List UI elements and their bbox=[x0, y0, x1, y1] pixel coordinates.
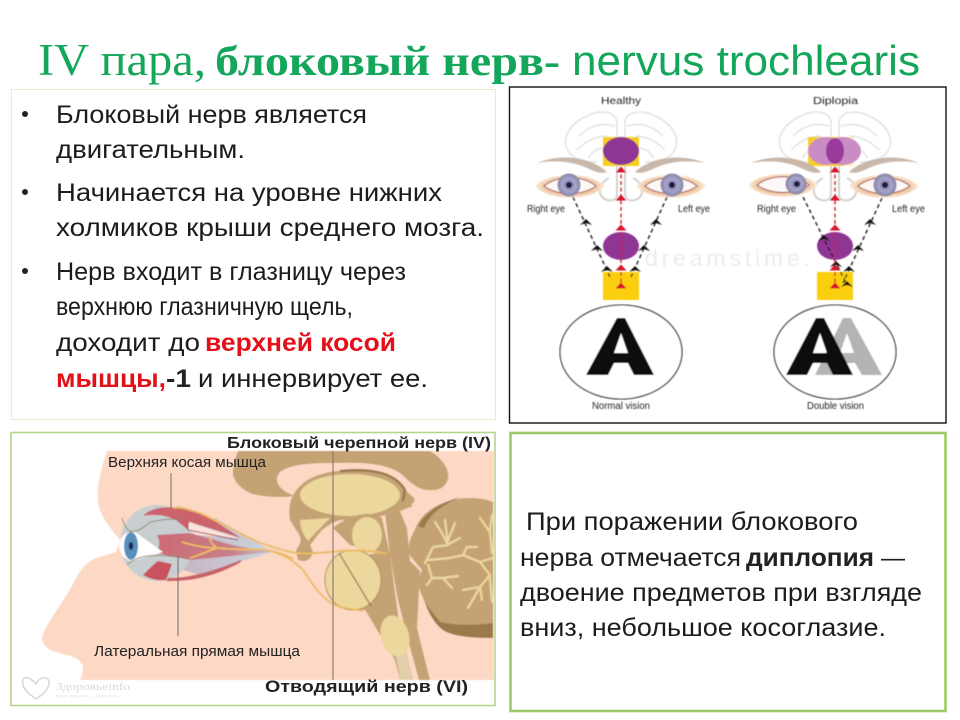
bullet 2 text: холмиков крыши среднего мозга. bbox=[56, 214, 484, 242]
note text: При поражении блокового bbox=[526, 508, 858, 536]
bullet 1 text bbox=[22, 101, 367, 164]
diplopia column: Left eye bbox=[892, 204, 925, 215]
title: IV пара, bbox=[38, 35, 206, 85]
peduncle strip bbox=[385, 501, 430, 680]
note text: нерва отмечается bbox=[520, 544, 741, 572]
cerebrum arch bbox=[233, 451, 448, 497]
diplopia column bbox=[748, 96, 925, 412]
healthy column: Left eye bbox=[678, 204, 710, 215]
right eye bbox=[535, 174, 605, 198]
bullet 3 text: Нерв входит в глазницу через bbox=[56, 258, 406, 286]
double vision circle with two letters A bbox=[774, 305, 896, 399]
cornea and iris bbox=[119, 532, 163, 561]
red arrows bbox=[834, 168, 836, 288]
note text: вниз, небольшое косоглазие. bbox=[520, 614, 886, 642]
label: abducens nerve: Отводящий нерв (VI) bbox=[265, 677, 468, 696]
bullet 2 text: Начинается на уровне нижних bbox=[56, 179, 443, 207]
diplopia column: Right eye bbox=[757, 204, 796, 215]
diplopia column: Diplopia bbox=[813, 96, 859, 107]
healthy column bbox=[527, 96, 710, 412]
bullet 3 text: верхней косой bbox=[205, 329, 396, 357]
logo watermark bbox=[23, 678, 131, 699]
normal vision circle with letter A bbox=[560, 305, 682, 399]
note text bbox=[520, 508, 922, 642]
logo watermark: Будь здоров — будь info bbox=[56, 693, 119, 698]
pointer line: superior oblique bbox=[170, 473, 172, 508]
lateral rectus muscle bbox=[157, 533, 272, 560]
diplopia column: Double vision bbox=[807, 401, 864, 412]
healthy column: Healthy bbox=[601, 96, 641, 107]
left eye bbox=[636, 174, 706, 198]
eyeball and muscles bbox=[119, 505, 272, 581]
superior oblique muscle bbox=[143, 507, 241, 538]
label: lateral rectus: Латеральная прямая мышца bbox=[94, 644, 301, 660]
pointer line: trochlear nerve bbox=[332, 451, 334, 680]
healthy column: Right eye bbox=[527, 204, 565, 215]
inferior muscles bbox=[143, 561, 172, 580]
panel: healthy vs diplopia diagram bbox=[510, 87, 946, 423]
bullet 3 text bbox=[22, 258, 428, 393]
label: trochlear nerve: Блоковый черепной нерв (IV) bbox=[227, 435, 491, 452]
bullet 1 text: Блоковый нерв является bbox=[56, 101, 367, 129]
note text: — bbox=[881, 544, 905, 572]
bullet 3 text: и иннервирует ее. bbox=[198, 365, 428, 393]
thalamus bbox=[289, 469, 414, 561]
title: nervus trochlearis bbox=[572, 37, 920, 84]
cerebellum bbox=[409, 497, 493, 638]
logo watermark: Здоровьеinfo bbox=[56, 681, 131, 693]
midbrain, pons and medulla ovals bbox=[352, 517, 382, 553]
left eye bbox=[849, 174, 919, 198]
note text: диплопия bbox=[746, 544, 874, 572]
bullet 1 text: двигательным. bbox=[56, 136, 245, 164]
black sight arrows bbox=[803, 197, 882, 285]
right eye turned inward bbox=[748, 174, 818, 197]
bullet 3 text: верхнюю глазничную щель, bbox=[56, 293, 353, 321]
title: блоковый нерв- bbox=[215, 39, 560, 85]
panel: description of the nerve bbox=[12, 90, 496, 420]
red arrows bbox=[620, 168, 622, 288]
bullet 3 text: мышцы, bbox=[56, 365, 166, 393]
head silhouette bbox=[42, 451, 494, 680]
black sight arrows bbox=[573, 197, 667, 277]
panel: anatomy illustration bbox=[11, 432, 495, 706]
watermark: dreamstime. bbox=[645, 245, 810, 271]
nerves bbox=[173, 508, 387, 611]
pointer line: lateral rectus bbox=[177, 556, 179, 636]
healthy column: Normal vision bbox=[592, 401, 650, 412]
bullet 3 text: -1 bbox=[166, 365, 191, 393]
panel: diplopia note bbox=[510, 433, 946, 711]
bullet 3 text: доходит до bbox=[56, 329, 200, 357]
label: superior oblique: Верхняя косая мышца bbox=[108, 455, 267, 471]
note text: двоение предметов при взгляде bbox=[520, 579, 922, 607]
bullet 2 text bbox=[22, 179, 484, 242]
title bbox=[38, 35, 920, 85]
brainstem bbox=[326, 514, 413, 680]
